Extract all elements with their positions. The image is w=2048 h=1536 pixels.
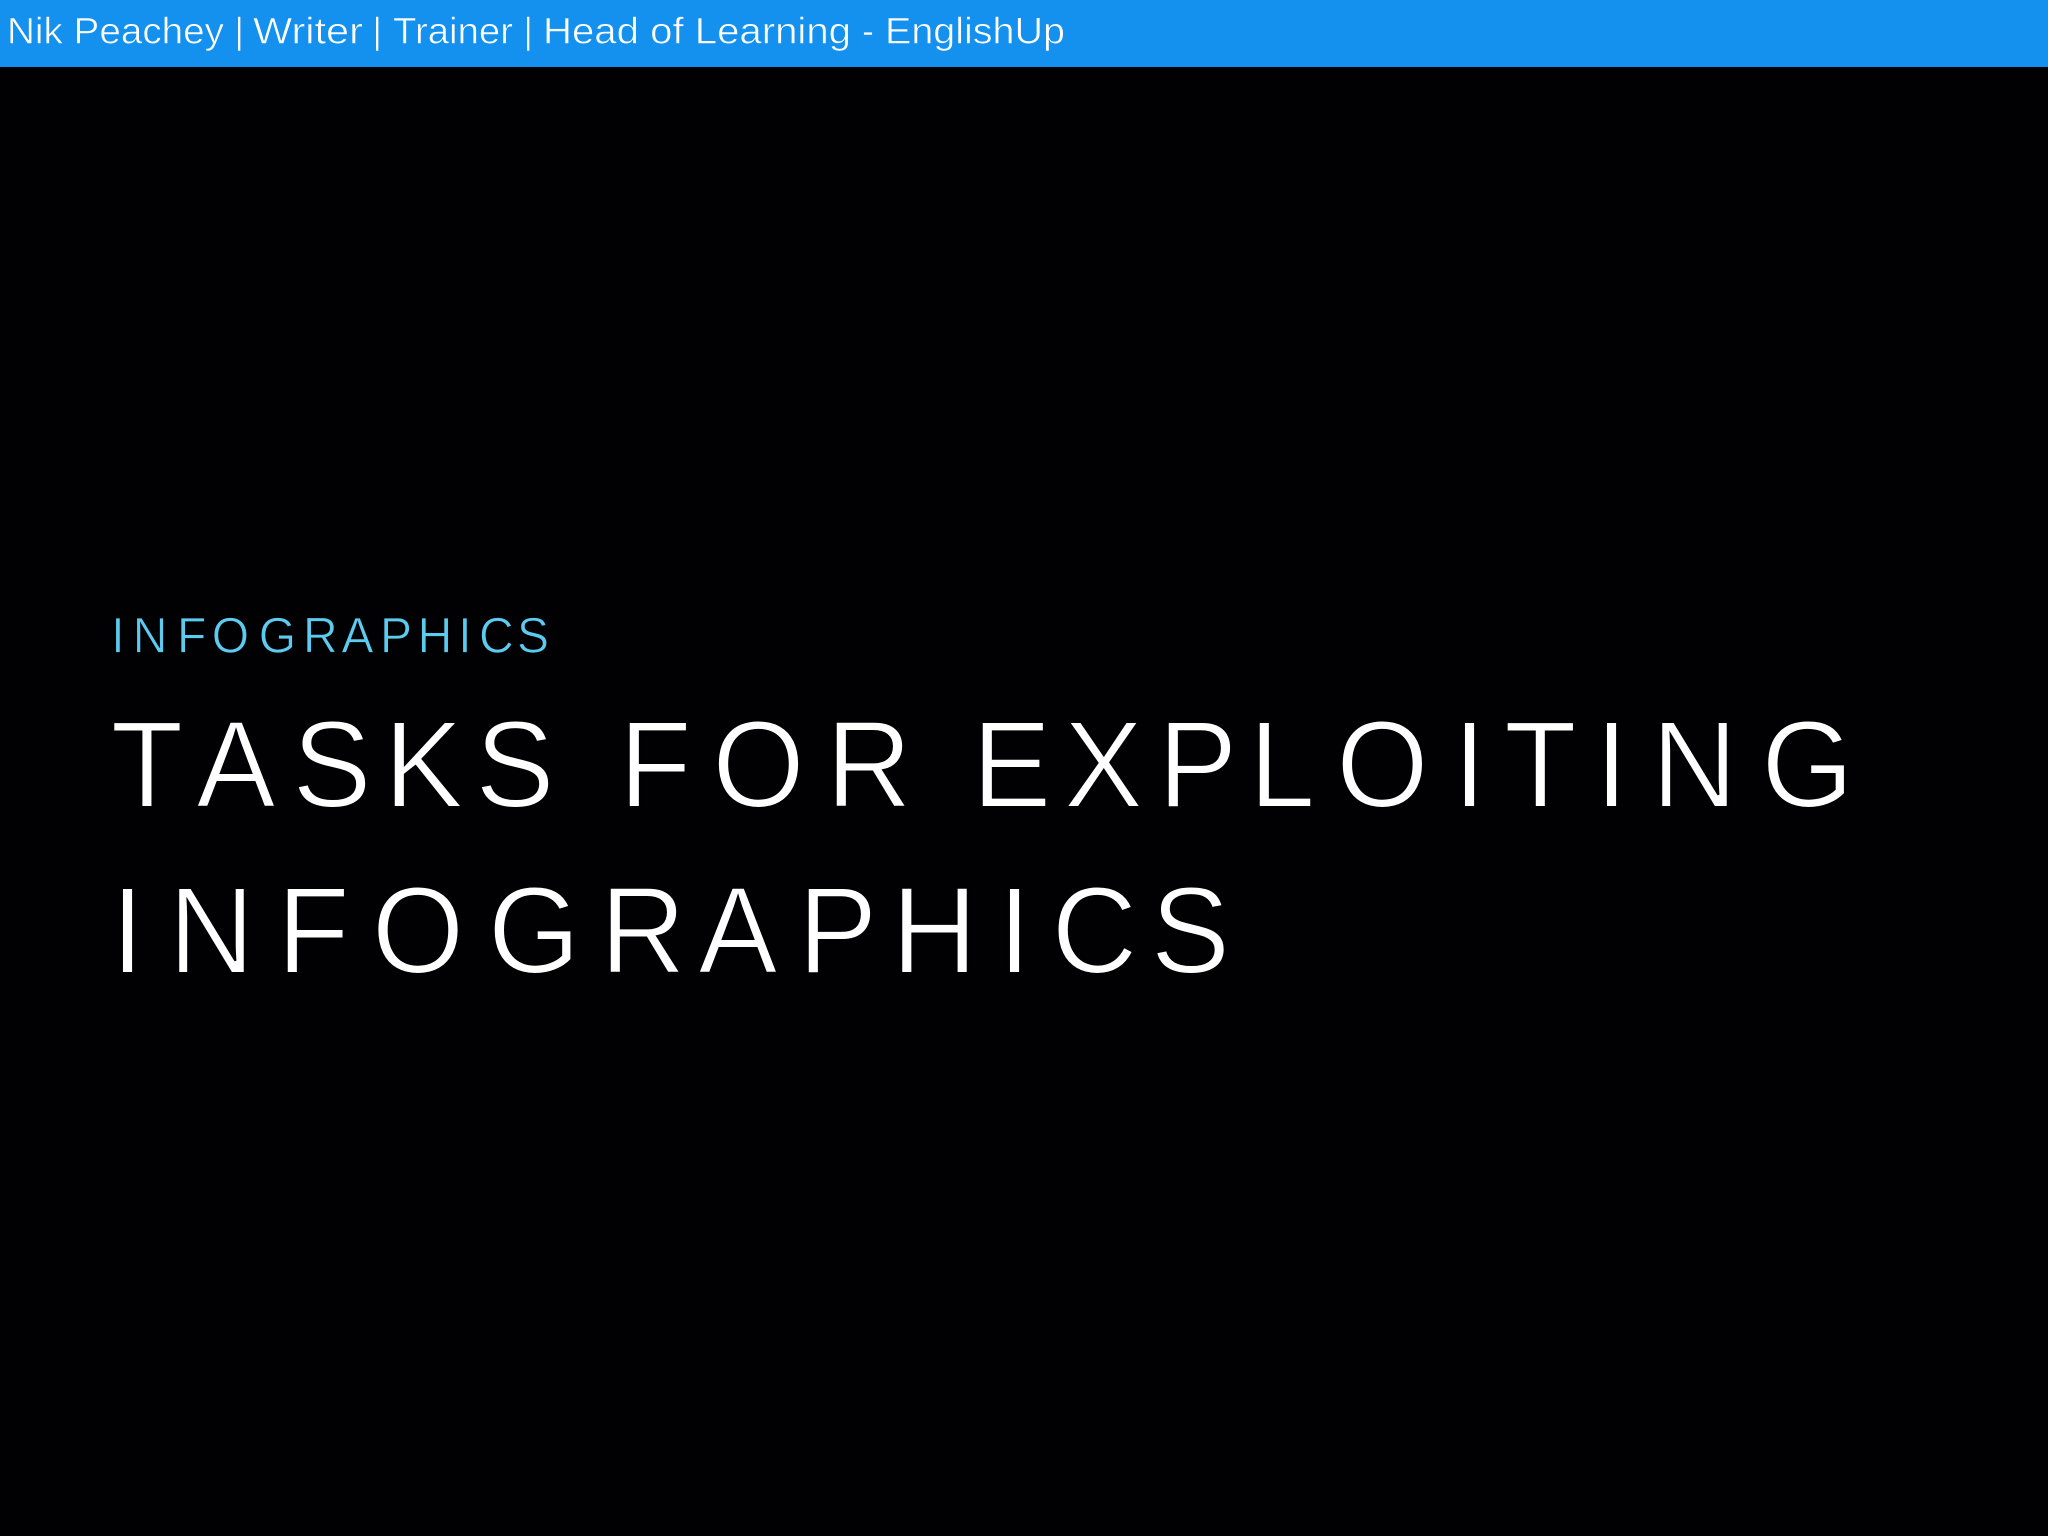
title line one xyxy=(111,695,1854,834)
top header bar xyxy=(0,0,2048,67)
header text xyxy=(7,10,1065,51)
header text: Head of Learning xyxy=(543,10,851,51)
title word: FOR: FOR xyxy=(619,695,912,834)
header text: Nik Peachey xyxy=(7,10,225,51)
header text: Trainer xyxy=(393,10,513,51)
header text: Writer xyxy=(253,10,363,51)
title word: TASKS: TASKS xyxy=(111,695,555,834)
header text: EnglishUp xyxy=(885,10,1065,51)
header text: | xyxy=(373,10,382,51)
title line two: INFOGRAPHICS: INFOGRAPHICS xyxy=(111,861,1230,1000)
header text: | xyxy=(234,10,244,51)
header text: | xyxy=(524,10,533,51)
header text: - xyxy=(862,10,874,51)
title word: EXPLOITING: EXPLOITING xyxy=(972,695,1854,834)
title xyxy=(111,695,1854,1000)
eyebrow label: INFOGRAPHICS xyxy=(111,609,549,664)
